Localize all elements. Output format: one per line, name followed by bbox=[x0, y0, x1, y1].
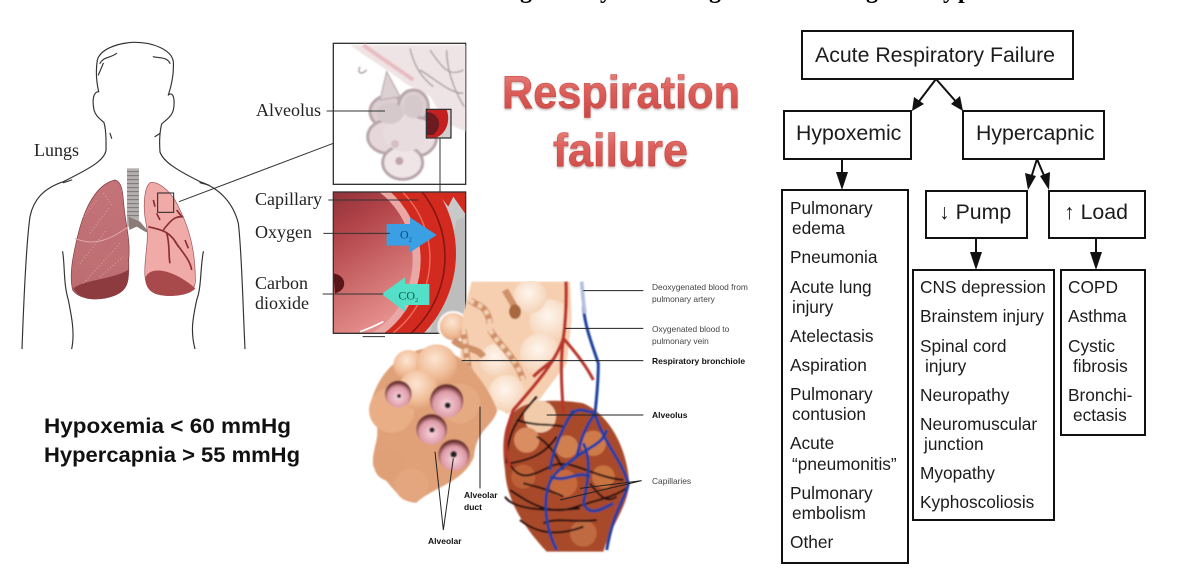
icon: oxygen arrow: O bbox=[400, 228, 409, 242]
box: decreased pump: ↓ Pump bbox=[939, 200, 1011, 224]
list: pump causes: CNS depression bbox=[920, 277, 1046, 297]
flowchart connectors bbox=[842, 79, 1096, 258]
list: pump causes: Brainstem injury bbox=[920, 306, 1044, 326]
label: carbon dioxide: Carbon bbox=[255, 273, 308, 293]
box: hypoxemic: Hypoxemic bbox=[796, 121, 902, 145]
label: alveolar duct: duct bbox=[464, 502, 482, 512]
list: hypoxemic causes: “pneumonitis” bbox=[792, 454, 897, 474]
illustration: human torso with lungs bbox=[22, 42, 245, 349]
icon: carbon dioxide arrow: 2 bbox=[415, 297, 418, 304]
list: load causes bbox=[1061, 270, 1145, 435]
list: load causes: COPD bbox=[1068, 277, 1118, 297]
list: hypoxemic causes: Acute bbox=[790, 433, 834, 453]
label: alveolus: Alveolus bbox=[652, 410, 688, 420]
icon: carbon dioxide arrow: CO bbox=[398, 288, 415, 302]
list: pump causes: Kyphoscoliosis bbox=[920, 492, 1035, 512]
list: hypoxemic causes: injury bbox=[792, 297, 834, 317]
icon: trachea bbox=[127, 168, 150, 233]
heading: respiration failure: Respiration bbox=[502, 66, 740, 118]
label: deoxygenated blood: pulmonary artery bbox=[652, 294, 716, 304]
alveolus sacs and faded vessels bbox=[350, 45, 466, 179]
list: pump causes: Neuropathy bbox=[920, 385, 1010, 405]
box: hypoxemic bbox=[784, 111, 911, 159]
bronchiole cluster bbox=[439, 280, 572, 414]
left diagram labels bbox=[34, 100, 322, 313]
label: alveolar sacs: Alveolar bbox=[428, 536, 462, 546]
box: increased load bbox=[1049, 191, 1145, 238]
illustration: alveolus close-up panel bbox=[179, 43, 466, 202]
box: decreased pump bbox=[926, 191, 1027, 238]
box: increased load: ↑ Load bbox=[1064, 200, 1128, 224]
blood gas thresholds bbox=[44, 414, 300, 467]
label leader lines bbox=[323, 111, 418, 337]
label: carbon dioxide: dioxide bbox=[255, 293, 309, 313]
list: load causes: fibrosis bbox=[1073, 356, 1128, 376]
label: deoxygenated blood: Deoxygenated blood from bbox=[652, 282, 748, 292]
label: oxygenated blood: Oxygenated blood to bbox=[652, 324, 730, 334]
icon: oxygen arrow bbox=[387, 217, 437, 252]
blood gas thresholds: Hypercapnia > 55 mmHg bbox=[44, 443, 300, 467]
list: load causes: ectasis bbox=[1073, 405, 1127, 425]
list: hypoxemic causes: Other bbox=[790, 532, 833, 552]
box: hypercapnic: Hypercapnic bbox=[976, 121, 1095, 145]
list: hypoxemic causes: Acute lung bbox=[790, 277, 872, 297]
leader lines for alveolar diagram bbox=[435, 291, 643, 530]
magnifier marker on lung bbox=[158, 193, 174, 212]
label: oxygen: Oxygen bbox=[255, 222, 312, 242]
alveolar sacs with openings bbox=[369, 344, 497, 503]
list: pump causes: Neuromuscular bbox=[920, 414, 1037, 434]
icon: right lung cut-away bbox=[144, 182, 195, 296]
list: pump causes: junction bbox=[923, 434, 984, 454]
list: hypoxemic causes: Aspiration bbox=[790, 355, 867, 375]
capillary wall cross section bbox=[334, 192, 465, 333]
list: pump causes bbox=[913, 270, 1054, 520]
flowchart: acute respiratory failure bbox=[782, 31, 1145, 563]
list: hypoxemic causes: embolism bbox=[792, 503, 866, 523]
label: alveolar duct: Alveolar bbox=[464, 490, 498, 500]
list: pump causes: injury bbox=[925, 356, 967, 376]
label: lungs: Lungs bbox=[34, 140, 79, 160]
list: hypoxemic causes: Atelectasis bbox=[790, 326, 874, 346]
box: acute respiratory failure bbox=[802, 31, 1073, 79]
list: hypoxemic causes: edema bbox=[792, 218, 845, 238]
label: capillaries: Capillaries bbox=[652, 476, 691, 486]
list: load causes: Asthma bbox=[1068, 306, 1127, 326]
inset red capillary marker bbox=[426, 109, 451, 138]
list: hypoxemic causes: Pulmonary bbox=[790, 198, 873, 218]
heading: respiration failure bbox=[502, 66, 740, 176]
list: hypoxemic causes: contusion bbox=[792, 404, 866, 424]
blood gas thresholds: Hypoxemia < 60 mmHg bbox=[44, 414, 291, 438]
body outline bbox=[22, 42, 245, 349]
connector lines between panels bbox=[179, 138, 440, 202]
list: hypoxemic causes: Pulmonary bbox=[790, 384, 873, 404]
capillary network cluster bbox=[503, 282, 629, 552]
label: alveolus: Alveolus bbox=[256, 100, 321, 120]
label: respiratory bronchiole: Respiratory bronchiole bbox=[652, 356, 745, 366]
heading: respiration failure: failure bbox=[553, 124, 688, 176]
list: pump causes: Myopathy bbox=[920, 463, 995, 483]
icon: left lung bbox=[71, 180, 129, 299]
list: load causes: Bronchi- bbox=[1068, 385, 1132, 405]
illustration: capillary and gas exchange panel bbox=[322, 110, 466, 338]
box: hypercapnic bbox=[963, 111, 1104, 159]
list: hypoxemic causes: Pneumonia bbox=[790, 247, 878, 267]
flowchart arrowheads bbox=[836, 96, 1102, 270]
list: hypoxemic causes: Pulmonary bbox=[790, 483, 873, 503]
list: pump causes: Spinal cord bbox=[920, 336, 1006, 356]
label: oxygenated blood: pulmonary vein bbox=[652, 336, 709, 346]
list: hypoxemic causes bbox=[782, 190, 908, 563]
label: capillary: Capillary bbox=[255, 189, 322, 209]
illustration: alveolar sacs and capillary network bbox=[369, 280, 643, 552]
icon: oxygen arrow: 2 bbox=[409, 236, 412, 243]
box: acute respiratory failure: Acute Respiratory Failure bbox=[815, 43, 1055, 67]
alveolar diagram labels bbox=[428, 282, 748, 546]
icon: carbon dioxide arrow bbox=[382, 277, 429, 312]
list: load causes: Cystic bbox=[1068, 336, 1115, 356]
